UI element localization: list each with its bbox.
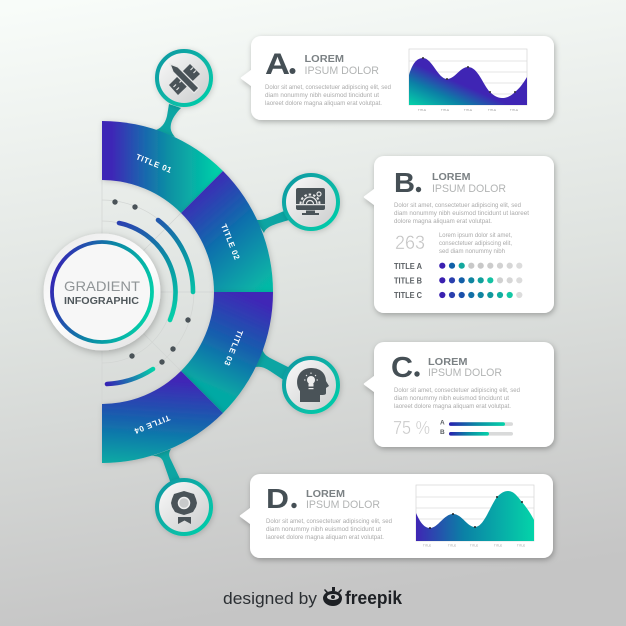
panel B body text — [394, 203, 529, 225]
area chart A: TITLE — [488, 108, 496, 112]
panel D heading: LOREM — [306, 488, 345, 500]
panel B body text: dolore magna aliquam erat volutpat. — [394, 219, 492, 225]
panel A body text — [265, 85, 391, 107]
panel D body text: diam nonummy nibh euismod tincidunt ut — [266, 527, 381, 533]
panel D body text: Dolor sit amet, consectetuer adipiscing elit, sed — [266, 519, 392, 525]
segment: title 01 — [102, 121, 223, 213]
panel A card — [241, 36, 554, 120]
progress bar B — [440, 429, 513, 436]
segment label 01: TITLE 01 — [135, 152, 173, 175]
panel C letter: C — [391, 352, 413, 384]
segment label 02: TITLE 02 — [219, 223, 242, 261]
panel B letter: B — [394, 167, 415, 198]
panel B subheading: IPSUM DOLOR — [432, 183, 506, 195]
dot rating: title B — [394, 276, 522, 286]
area chart A — [409, 49, 527, 112]
dot rating: title A: TITLE A — [394, 262, 422, 271]
icon: head with light bulb — [284, 358, 338, 412]
panel B body text: diam nonummy nibh euismod tincidunt ut laoreet — [394, 211, 529, 217]
panel D body text: laoreet dolore magna aliquam erat volutpat. — [266, 535, 384, 541]
central badge — [44, 234, 160, 350]
panel B body text: Dolor sit amet, consectetuer adipiscing elit, sed — [394, 203, 521, 209]
footer: freepik: freepik — [345, 588, 403, 608]
connector stems — [152, 104, 290, 484]
panel D letter: D — [266, 483, 289, 514]
badge title: GRADIENT — [64, 278, 140, 294]
icon: freepik logo — [323, 587, 342, 606]
panel C body text: Dolor sit amet, consectetuer adipiscing elit, sed — [394, 388, 520, 394]
panel A body text: laoreet dolore magna aliquam erat volutpat. — [265, 101, 382, 107]
area chart A: TITLE — [510, 108, 518, 112]
panel B heading: LOREM — [432, 171, 471, 183]
panel C heading: LOREM — [428, 356, 468, 368]
icon: pencil and ruler — [157, 51, 211, 105]
panel A subheading: IPSUM DOLOR — [304, 65, 379, 77]
panel B side text: sed diam nonummy nibh — [439, 249, 505, 255]
badge subtitle: INFOGRAPHIC — [64, 295, 139, 307]
panel A body text: Dolor sit amet, consectetuer adipiscing elit, sed — [265, 85, 391, 91]
panel B side text — [439, 233, 512, 255]
segment: title 04 — [102, 371, 223, 463]
panel A body text: diam nonummy nibh euismod tincidunt ut — [265, 93, 379, 99]
icon: monitor with gear — [284, 175, 338, 229]
panel B side text: consectetuer adipiscing elit, — [439, 241, 512, 247]
dot rating: title B: TITLE B — [394, 276, 422, 286]
area chart D — [416, 485, 534, 548]
dot rating: title C: TITLE C — [394, 291, 422, 300]
marker dots — [112, 199, 191, 365]
footer: designed by: designed by — [223, 589, 318, 608]
area chart A: TITLE — [464, 108, 472, 112]
panel A — [241, 36, 554, 120]
panel D card — [240, 474, 553, 558]
dot rating: title C — [394, 291, 522, 300]
progress bar B: B — [440, 429, 445, 436]
central diagram — [44, 104, 290, 484]
panel D body text — [266, 519, 392, 541]
panel D — [240, 474, 553, 558]
panel B card — [364, 156, 554, 313]
segment: title 02 — [181, 171, 273, 292]
area chart D: TITLE — [470, 544, 478, 548]
big number 263: 263 — [395, 233, 425, 254]
area chart A: TITLE — [441, 108, 449, 112]
area chart D: TITLE — [517, 544, 525, 548]
panel C — [364, 342, 554, 447]
footer credit — [223, 587, 403, 608]
inner guide lines — [102, 180, 214, 404]
panel D letter — [266, 483, 297, 514]
dot rating: title A — [394, 262, 522, 271]
progress bar A — [440, 420, 513, 426]
area chart D: TITLE — [448, 544, 456, 548]
area chart D: TITLE — [494, 544, 502, 548]
panel A letter: A — [265, 48, 290, 81]
panel C body text: diam nonummy nibh euismod tincidunt ut — [394, 396, 509, 402]
segment label 03: TITLE 03 — [222, 329, 245, 367]
panel C card — [364, 342, 554, 447]
panel B side text: Lorem ipsum dolor sit amet, — [439, 233, 512, 239]
panel C body text — [394, 388, 520, 410]
area chart D: TITLE — [423, 544, 431, 548]
gradient arc indicators — [107, 220, 193, 384]
panel D subheading: IPSUM DOLOR — [306, 499, 380, 511]
big number 75%: 75 % — [393, 418, 430, 438]
segment: title 03 — [181, 292, 273, 413]
segment label 04: TITLE 04 — [133, 413, 171, 436]
progress bar A: A — [440, 420, 445, 426]
panel A heading: LOREM — [304, 53, 344, 65]
panel C subheading: IPSUM DOLOR — [428, 367, 502, 379]
panel C body text: laoreet dolore magna aliquam erat volutpat. — [394, 404, 511, 410]
area chart A: TITLE — [418, 108, 426, 112]
panel B — [364, 156, 554, 313]
icon: award badge — [157, 480, 211, 534]
